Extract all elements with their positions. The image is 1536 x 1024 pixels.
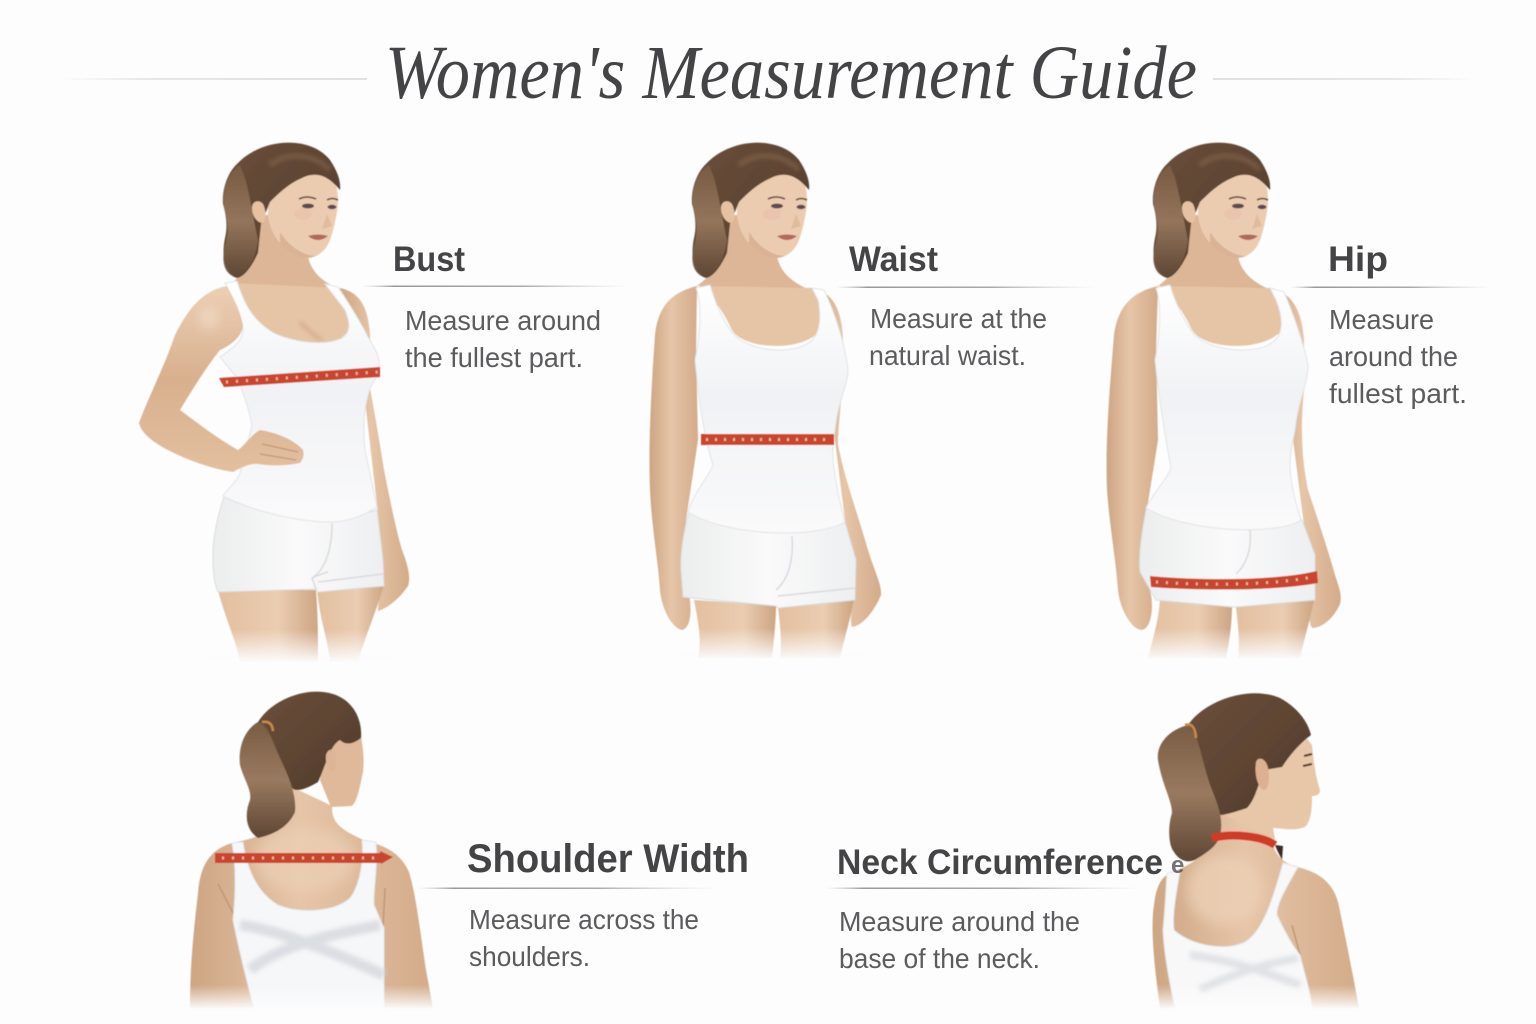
right arm	[1272, 288, 1341, 628]
title: Women's Measurement Guide	[385, 31, 1197, 115]
right arm	[340, 288, 409, 611]
hair	[1188, 693, 1311, 815]
measuring tape: bust	[219, 367, 380, 387]
legs	[218, 590, 318, 662]
eye and brow	[1303, 754, 1312, 766]
right arm	[815, 288, 881, 627]
label: neck circumference: e	[1171, 852, 1184, 879]
arm creases	[218, 884, 385, 928]
head	[692, 143, 809, 278]
figure: waist measurement model	[649, 143, 881, 661]
measuring tape: neck	[1212, 836, 1283, 860]
label: bust: Bust	[393, 240, 465, 279]
left arm	[649, 286, 698, 630]
ear	[1255, 759, 1269, 790]
arm crease	[1292, 925, 1300, 955]
measuring tape: waist	[701, 434, 834, 445]
left arm	[1107, 286, 1158, 630]
tank top	[220, 281, 379, 522]
tank top	[1146, 285, 1308, 530]
shorts	[213, 497, 384, 592]
hair tie	[262, 722, 273, 731]
label: neck circumference	[826, 843, 1184, 974]
leg fade	[205, 630, 395, 663]
leg fade	[680, 628, 870, 661]
legs	[1148, 600, 1232, 658]
tank top	[688, 285, 848, 533]
measuring tape: hip	[1150, 571, 1318, 590]
base fade	[180, 985, 442, 1010]
label: hip	[1290, 240, 1492, 409]
ear	[326, 750, 336, 772]
label: neck circumference: Measure around the	[839, 906, 1080, 937]
leg fade	[1135, 628, 1325, 661]
measuring tape: shoulder width	[215, 851, 393, 864]
figure: bust measurement model	[139, 143, 409, 663]
hair tie	[1185, 725, 1196, 738]
shorts	[681, 508, 856, 608]
label: hip: Hip	[1328, 240, 1388, 279]
left arm on hip	[139, 286, 304, 472]
figure: hip measurement model	[1107, 143, 1341, 661]
label: shoulder width: shoulders.	[469, 941, 590, 972]
legs	[694, 600, 776, 658]
ponytail	[1158, 725, 1221, 861]
neck and chest skin	[1158, 215, 1284, 346]
label: waist	[836, 240, 1096, 371]
figure: neck circumference model from behind	[1150, 693, 1365, 1010]
label: bust	[362, 240, 630, 373]
back and arms	[190, 785, 433, 1008]
label: shoulder width	[418, 837, 749, 972]
ponytail	[240, 722, 295, 838]
label: hip: Measure	[1329, 304, 1434, 335]
back and arms	[1153, 800, 1359, 1008]
tank top back	[1163, 863, 1312, 1008]
label: hip: fullest part.	[1329, 378, 1467, 409]
label: bust: the fullest part.	[405, 342, 583, 373]
hair	[258, 692, 361, 790]
face profile	[320, 732, 364, 807]
neck and chest skin	[697, 215, 822, 346]
neck and chest skin	[228, 215, 350, 346]
tank top shading	[1190, 955, 1300, 990]
head	[1153, 143, 1270, 278]
label: waist: Waist	[849, 240, 938, 279]
label: neck circumference: Neck Circumference	[837, 843, 1163, 882]
label: bust: Measure around	[405, 305, 601, 336]
label: shoulder width: Measure across the	[469, 904, 699, 935]
label: shoulder width: Shoulder Width	[467, 837, 749, 881]
label: waist: natural waist.	[869, 340, 1026, 371]
label: waist: Measure at the	[870, 303, 1047, 334]
tank top shading	[240, 925, 384, 975]
tank top back	[232, 840, 384, 1008]
head	[223, 143, 340, 278]
figure: shoulder width model from behind	[180, 692, 442, 1010]
face profile	[1225, 730, 1320, 840]
label: neck circumference: base of the neck.	[839, 943, 1040, 974]
shorts	[1139, 505, 1315, 607]
label: hip: around the	[1329, 341, 1458, 372]
base fade	[1150, 985, 1365, 1010]
